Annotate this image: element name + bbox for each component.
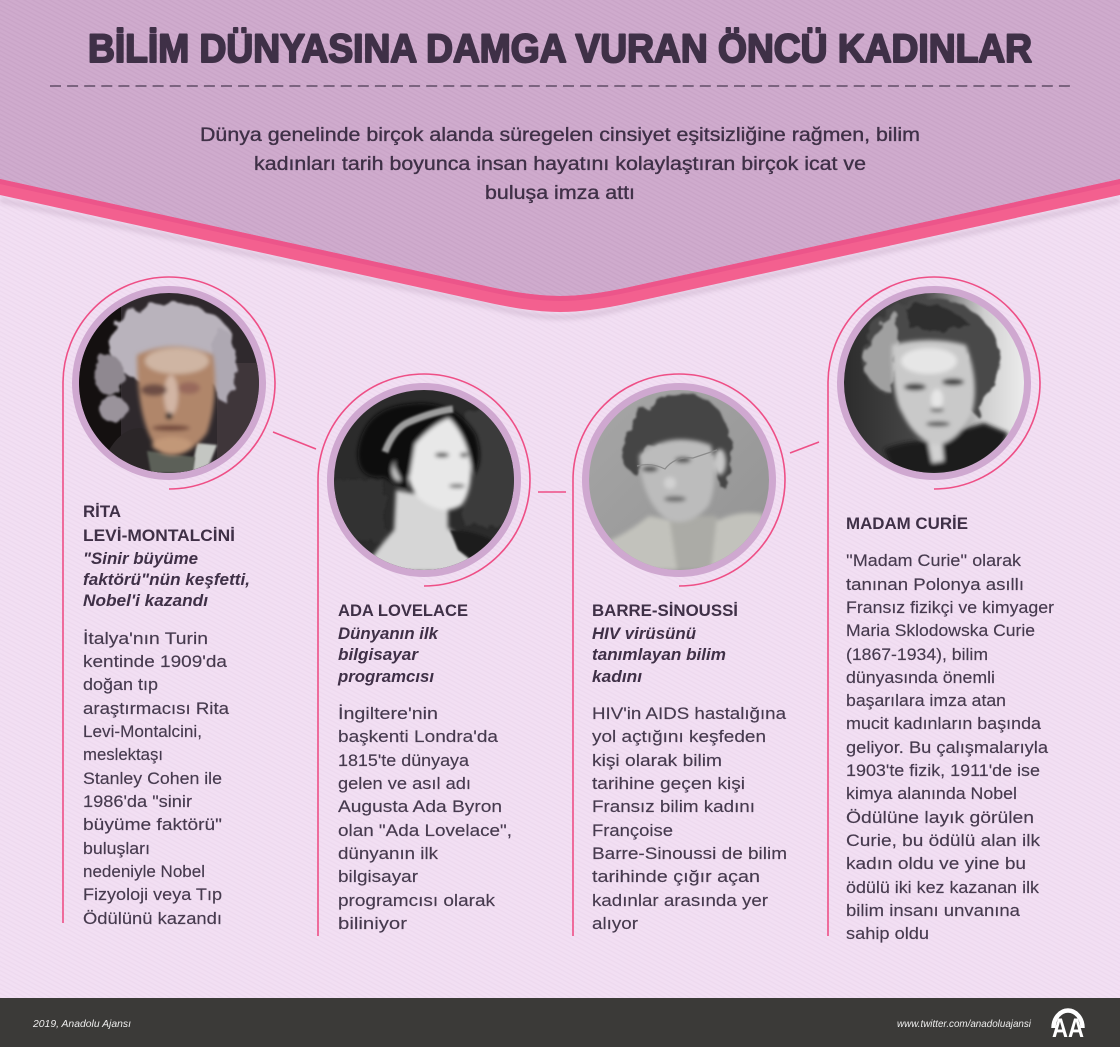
body text: Rita: meslektaşı: [83, 745, 163, 764]
portrait: Curie: [837, 286, 1031, 480]
frame arc and line: [318, 374, 530, 936]
body text: Curie: ödülü iki kez kazanan ilk: [846, 878, 1040, 897]
subtitle: Rita: Nobel'i kazandı: [83, 591, 208, 610]
body text: Ada: Augusta Ada Byron: [338, 797, 502, 816]
name: Ada: ADA LOVELACE: [338, 601, 468, 620]
body text: Curie: tanınan Polonya asıllı: [846, 575, 1024, 594]
body text: Ada: bilgisayar: [338, 867, 418, 886]
body text: Rita: İtalya'nın Turin: [83, 629, 208, 648]
icon: Anadolu Agency logo: AA: [1052, 1013, 1084, 1043]
body text: Rita: 1986'da "sinir: [83, 792, 192, 811]
body text: Curie: ''Madam Curie'' olarak: [846, 551, 1022, 570]
subtitle: Ada: Dünyanın ilk: [338, 624, 440, 643]
body text: Barre-Sinoussi: HIV'in AIDS hastalığına: [592, 704, 787, 723]
panel: Ada Lovelace: [318, 374, 530, 936]
name: Rita: LEVİ-MONTALCİNİ: [83, 526, 235, 545]
body text: Rita: [83, 629, 230, 928]
body text: Barre-Sinoussi: Fransız bilim kadını: [592, 797, 755, 816]
body text: Curie: Curie, bu ödülü alan ilk: [846, 831, 1041, 850]
body text: Ada: olan "Ada Lovelace",: [338, 821, 512, 840]
body text: Rita: doğan tıp: [83, 675, 158, 694]
body text: Barre-Sinoussi: kişi olarak bilim: [592, 751, 722, 770]
body text: Barre-Sinoussi: kadınlar arasında yer: [592, 891, 768, 910]
panel: Barre-Sinoussi: [573, 374, 787, 936]
body text: Curie: başarılara imza atan: [846, 691, 1006, 710]
name: Barre-Sinoussi: BARRE-SİNOUSSİ: [592, 601, 738, 620]
body text: Curie: kadın oldu ve yine bu: [846, 854, 1026, 873]
name: Rita: [83, 502, 235, 545]
body text: Barre-Sinoussi: tarihinde çığır açan: [592, 867, 760, 886]
body text: Rita: araştırmacısı Rita: [83, 699, 230, 718]
frame arc and line: [63, 277, 275, 923]
header banner: [0, 0, 1120, 320]
body text: Curie: Ödülüne layık görülen: [846, 808, 1034, 827]
subtitle: Barre-Sinoussi: HIV virüsünü: [592, 624, 697, 643]
body text: Curie: [846, 551, 1054, 943]
intro text: [200, 125, 920, 204]
body text: Rita: Levi-Montalcini,: [83, 722, 202, 741]
body text: Barre-Sinoussi: yol açtığını keşfeden: [592, 727, 766, 746]
body text: Barre-Sinoussi: Françoise: [592, 821, 673, 840]
body text: Ada: programcısı olarak: [338, 891, 496, 910]
body text: Rita: Ödülünü kazandı: [83, 909, 222, 928]
title divider: [50, 85, 1070, 87]
footer credit: 2019, Anadolu Ajansı: [32, 1018, 131, 1030]
subtitle: Barre-Sinoussi: tanımlayan bilim: [592, 645, 726, 664]
intro text: buluşa imza attı: [485, 183, 635, 204]
subtitle: Ada: programcısı: [337, 667, 434, 686]
body text: Barre-Sinoussi: Barre-Sinoussi de bilim: [592, 844, 787, 863]
subtitle: Rita: "Sinir büyüme: [83, 549, 198, 568]
body text: Curie: Maria Sklodowska Curie: [846, 621, 1035, 640]
body text: Ada: İngiltere'nin: [338, 704, 438, 723]
body text: Curie: (1867-1934), bilim: [846, 645, 988, 664]
portrait: Ada: [327, 383, 521, 577]
body text: Ada: dünyanın ilk: [338, 844, 439, 863]
body text: Curie: kimya alanında Nobel: [846, 784, 1017, 803]
body text: Curie: sahip oldu: [846, 924, 929, 943]
portrait: Rita: [72, 286, 266, 480]
name: Rita: RİTA: [83, 502, 121, 521]
frame arc and line: [573, 374, 785, 936]
panel: Rita Levi-Montalcini: [63, 277, 275, 928]
subtitle: Ada: [337, 624, 440, 686]
body text: Curie: dünyasında önemli: [846, 668, 995, 687]
subtitle: Barre-Sinoussi: [592, 624, 726, 686]
subtitle: Rita: [83, 549, 250, 610]
body text: Curie: geliyor. Bu çalışmalarıyla: [846, 738, 1049, 757]
body text: Rita: nedeniyle Nobel: [83, 862, 205, 881]
connector lines: [273, 432, 819, 492]
body text: Rita: Stanley Cohen ile: [83, 769, 222, 788]
body text: Ada: 1815'te dünyaya: [338, 751, 470, 770]
intro text: Dünya genelinde birçok alanda süregelen cinsiyet eşitsizliğine rağmen, bilim: [200, 125, 920, 146]
name: Curie: MADAM CURİE: [846, 514, 968, 533]
body text: Ada: biliniyor: [338, 914, 407, 933]
body text: Ada: [338, 704, 512, 933]
body text: Curie: Fransız fizikçi ve kimyager: [846, 598, 1054, 617]
body text: Ada: başkenti Londra'da: [338, 727, 499, 746]
panel: Madam Curie: [828, 277, 1054, 943]
body text: Curie: bilim insanı unvanına: [846, 901, 1021, 920]
footer url: www.twitter.com/anadoluajansi: [897, 1018, 1032, 1030]
title: BİLİM DÜNYASINA DAMGA VURAN ÖNCÜ KADINLAR: [88, 27, 1032, 71]
body text: Rita: Fizyoloji veya Tıp: [83, 885, 222, 904]
subtitle: Ada: bilgisayar: [338, 645, 419, 664]
subtitle: Rita: faktörü"nün keşfetti,: [83, 570, 250, 589]
body text: Rita: kentinde 1909'da: [83, 652, 228, 671]
body text: Rita: büyüme faktörü": [83, 815, 222, 834]
portrait: Barre-Sinoussi: [582, 383, 776, 577]
footer: [0, 998, 1120, 1047]
body text: Barre-Sinoussi: tarihine geçen kişi: [592, 774, 745, 793]
subtitle: Barre-Sinoussi: kadını: [592, 667, 642, 686]
intro text: kadınları tarih boyunca insan hayatını kolaylaştıran birçok icat ve: [254, 154, 866, 175]
body text: Curie: 1903'te fizik, 1911'de ise: [846, 761, 1040, 780]
body text: Rita: buluşları: [83, 839, 150, 858]
body text: Ada: gelen ve asıl adı: [338, 774, 471, 793]
body text: Barre-Sinoussi: [592, 704, 787, 933]
body text: Curie: mucit kadınların başında: [846, 714, 1042, 733]
body text: Barre-Sinoussi: alıyor: [592, 914, 638, 933]
frame arc and line: [828, 277, 1040, 936]
